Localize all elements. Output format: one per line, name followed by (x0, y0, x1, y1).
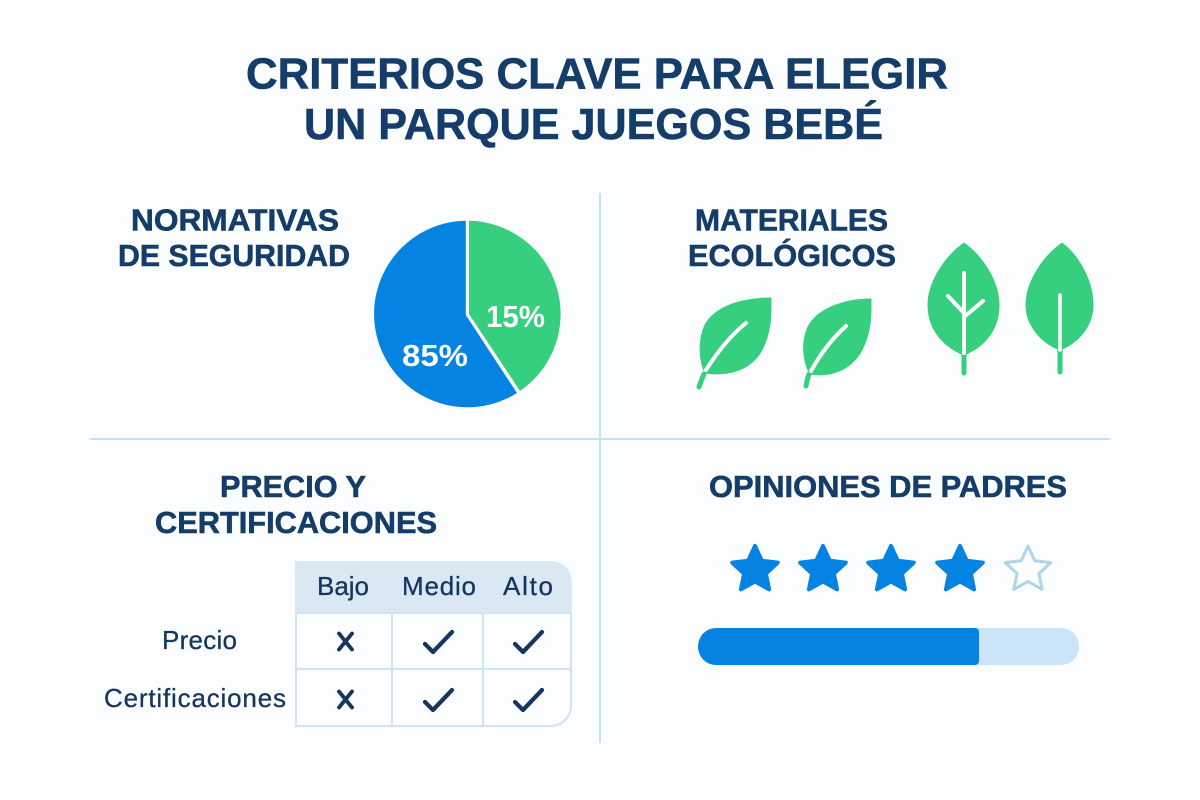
title: CRITERIOS CLAVE PARA ELEGIR (246, 50, 948, 98)
table: Bajo (317, 571, 369, 601)
heading: normativas de seguridad: NORMATIVAS (131, 202, 339, 238)
panel: precio y certificaciones (104, 469, 572, 726)
panel: opiniones de padres (698, 469, 1079, 665)
pie chart: 15% (486, 299, 545, 334)
heading: materiales ecológicos (688, 202, 896, 273)
pie chart (374, 221, 561, 407)
icon: leaf 1 (699, 298, 771, 387)
table: Medio (402, 571, 476, 601)
heading: precio y certificaciones: PRECIO Y (220, 469, 366, 504)
star rating (732, 546, 1051, 589)
table: Certificaciones (104, 683, 286, 713)
heading: materiales ecológicos: MATERIALES (695, 202, 888, 238)
table (104, 561, 572, 726)
icon: leaf 3 (928, 243, 999, 373)
heading: opiniones de padres: OPINIONES DE PADRES (709, 469, 1067, 504)
heading: materiales ecológicos: ECOLÓGICOS (688, 237, 896, 273)
panel: normativas de seguridad (118, 202, 561, 407)
progress bar (698, 628, 1079, 665)
heading: normativas de seguridad (118, 202, 350, 273)
table: Precio (162, 625, 237, 655)
table: Alto (503, 571, 553, 601)
title: UN PARQUE JUEGOS BEBÉ (304, 99, 883, 149)
icon: leaf 4 (1026, 243, 1093, 372)
heading: normativas de seguridad: DE SEGURIDAD (118, 238, 350, 273)
heading: precio y certificaciones (155, 469, 437, 540)
title (246, 50, 948, 149)
panel: materiales ecológicos (688, 202, 1093, 387)
icon: leaf 2 (804, 299, 871, 386)
heading: precio y certificaciones: CERTIFICACIONES (155, 505, 437, 540)
pie chart: 85% (402, 338, 468, 373)
